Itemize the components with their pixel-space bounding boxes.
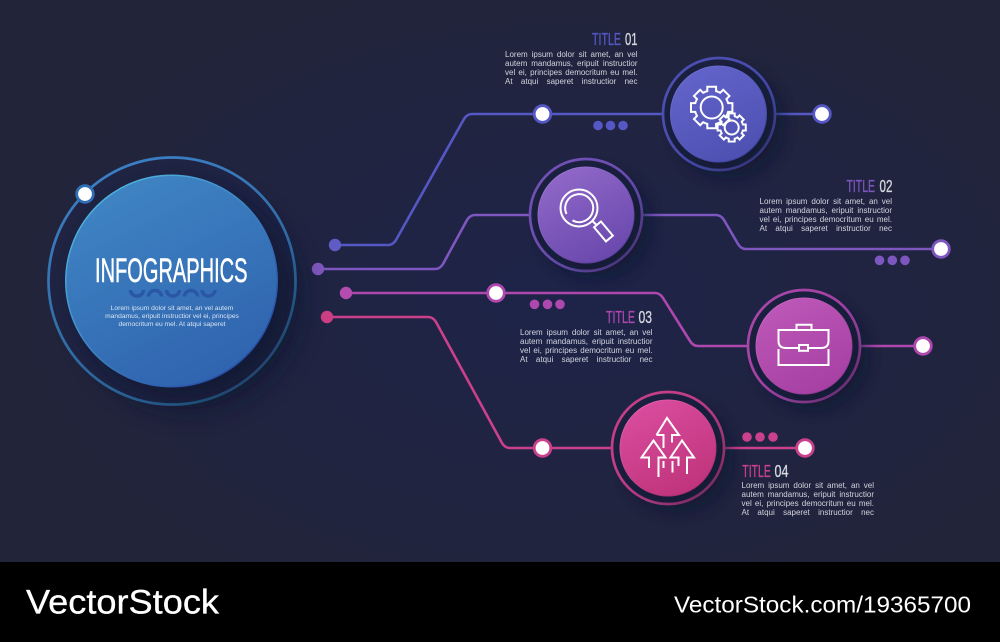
body text 4: Lorem ipsum dolor sit amet, an vel	[742, 481, 874, 490]
body text 1: At atqui saperet instructior nec	[505, 77, 638, 86]
heading: title 04: 04	[774, 461, 788, 481]
main circle body text: mandamus, eripuit instructior vel ei, principes	[105, 313, 239, 320]
icon: growth arrows	[642, 418, 694, 477]
body text 3: autem mandamus, eripuit instructior	[520, 337, 652, 346]
body text 4	[742, 481, 874, 517]
heading: title 03: TITLE	[606, 307, 635, 327]
connector line 4	[327, 317, 805, 448]
circle 1: gears	[663, 58, 779, 174]
circle 4: arrows	[612, 392, 728, 508]
heading: title 02: 02	[879, 176, 892, 196]
heading: title 02: TITLE	[846, 176, 874, 196]
heading: title 04: TITLE	[742, 461, 770, 481]
body text 3	[520, 328, 652, 364]
body text 2: At atqui saperet instructior nec	[760, 224, 892, 233]
three dots 4	[742, 432, 778, 442]
icon: briefcase	[778, 325, 828, 365]
text block 4	[742, 461, 874, 517]
body text 2: autem mandamus, eripuit instructior	[760, 206, 892, 215]
main circle body text	[105, 305, 239, 328]
body text 3: At atqui saperet instructior nec	[520, 355, 652, 364]
heading: title 03: 03	[638, 307, 652, 327]
main circle body text: democritum eu mel. At atqui saperet	[118, 321, 226, 328]
body text 3: vel ei, principes democritum eu mel.	[520, 346, 652, 355]
body text 1: Lorem ipsum dolor sit amet, an vel	[505, 50, 638, 59]
three dots 3	[530, 300, 565, 309]
body text 1: autem mandamus, eripuit instructior	[505, 59, 638, 68]
nodes line 2	[933, 241, 949, 257]
start dots	[312, 239, 352, 323]
body text 2	[760, 197, 892, 233]
body text 1	[505, 50, 638, 86]
connector line 1	[335, 114, 822, 245]
nodes line 1	[534, 106, 830, 122]
body text 2: vel ei, principes democritum eu mel.	[760, 215, 892, 224]
connector line 2	[318, 215, 940, 269]
text block 1	[505, 29, 638, 86]
body text 4: vel ei, principes democritum eu mel.	[742, 499, 874, 508]
main node	[77, 186, 93, 202]
circle 3: briefcase	[748, 290, 864, 406]
connector line 3	[346, 293, 923, 346]
icon: gears	[691, 87, 746, 142]
body text 3: Lorem ipsum dolor sit amet, an vel	[520, 328, 652, 337]
heading: title 01: 01	[625, 29, 638, 49]
body text 2: Lorem ipsum dolor sit amet, an vel	[760, 197, 892, 206]
three dots 1	[593, 121, 628, 130]
icon: magnifier	[560, 190, 613, 241]
footer banner	[0, 562, 1000, 642]
body text 4: At atqui saperet instructior nec	[742, 508, 874, 517]
text block 2	[760, 176, 892, 233]
main circle body text: Lorem ipsum dolor sit amet, an vel autem	[111, 305, 233, 312]
brand logo text: VectorStock	[26, 583, 220, 621]
text block 3	[520, 307, 652, 364]
main circle	[48, 158, 302, 412]
heading: title 01: TITLE	[592, 29, 621, 49]
body text 4: autem mandamus, eripuit instructior	[742, 490, 874, 499]
nodes line 4	[534, 440, 813, 456]
nodes line 3	[488, 285, 931, 354]
wave decoration	[130, 290, 215, 296]
body text 1: vel ei, principes democritum eu mel.	[505, 68, 638, 77]
main heading: INFOGRAPHICS	[95, 252, 248, 290]
circle 2: magnifier	[530, 159, 646, 275]
image id text: VectorStock.com/19365700	[674, 592, 971, 618]
three dots 2	[875, 255, 910, 265]
